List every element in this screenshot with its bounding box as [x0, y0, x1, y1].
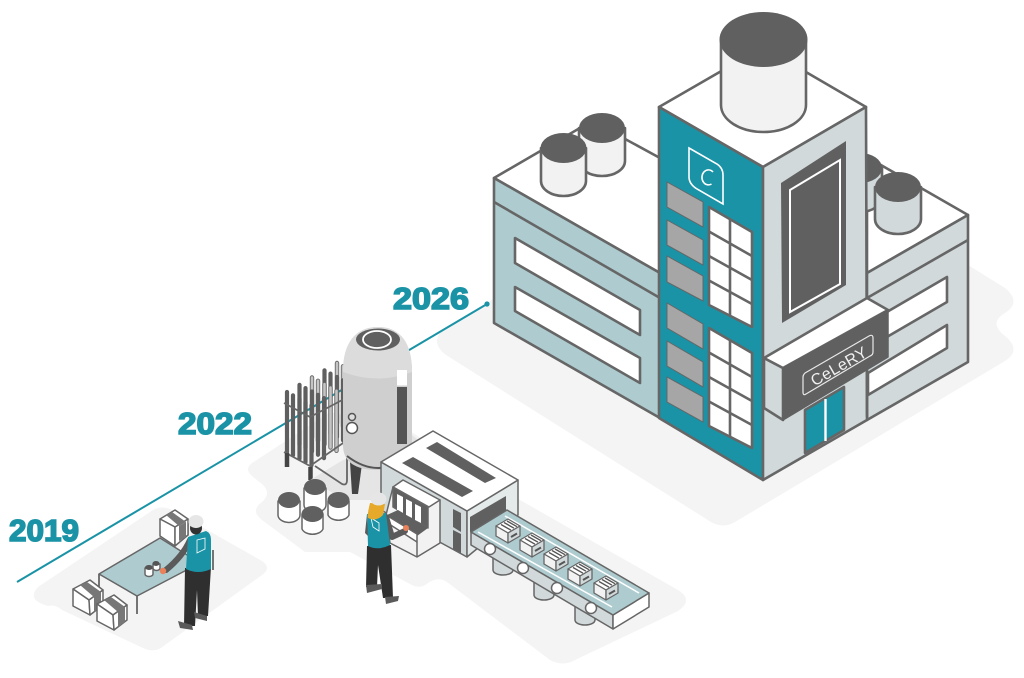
big rooftop tank: [720, 12, 808, 132]
torso: [367, 513, 390, 548]
belt end: [613, 593, 649, 629]
machine opening: [470, 496, 506, 532]
tower tall dark window: [781, 141, 846, 323]
workbench: [73, 510, 213, 630]
rooftop tanks left: [540, 113, 625, 196]
tank gauges: [346, 414, 358, 434]
table legs: [99, 550, 213, 614]
celery logo badge: [689, 148, 723, 204]
celery sign: CeLeRY: [808, 344, 871, 390]
tank floor shadow: [310, 435, 425, 500]
legs: [366, 545, 393, 598]
entrance door: [805, 373, 867, 453]
belt top: [471, 510, 649, 615]
tower window grid lower: [709, 328, 752, 448]
year label 2026: 2026: [393, 281, 469, 316]
control console: [386, 480, 440, 557]
torso: [186, 531, 211, 572]
right wing roof and tanks: [838, 153, 968, 273]
front-left box: [73, 580, 103, 615]
vent stripes: [402, 442, 496, 497]
tank stripe: [397, 370, 407, 444]
boxes on belt: [496, 519, 618, 600]
ground shadow: workbench: [34, 507, 267, 650]
factory building: [494, 12, 968, 480]
drums: [278, 479, 350, 534]
head: [190, 522, 202, 534]
tank body: [343, 327, 412, 470]
conveyor belt: [471, 510, 649, 629]
tower teal face: [659, 107, 763, 480]
rollers: [484, 544, 596, 614]
table top: [99, 538, 200, 596]
ground shadow: production line: [248, 412, 686, 664]
entrance canopy: [764, 298, 888, 420]
machine right face: [467, 480, 518, 557]
arm and hand: [386, 517, 405, 537]
shoes: [178, 612, 207, 630]
hard hat: [370, 492, 386, 506]
year label 2019: 2019: [9, 513, 79, 548]
machine top: [381, 431, 518, 511]
production machine: [381, 431, 518, 557]
year label 2022: 2022: [178, 406, 252, 441]
worker at control panel: [365, 492, 409, 604]
left wing facade: [494, 178, 660, 418]
tower roof: [659, 47, 866, 167]
tower window grid upper: [709, 207, 752, 327]
ground shadow: building: [437, 265, 1014, 526]
gas tube rack: [284, 363, 362, 480]
right wing facade: [867, 215, 968, 420]
front-right box: [97, 595, 127, 630]
tank pipe: [315, 437, 357, 484]
belt side: [471, 532, 613, 629]
worker at workbench: [160, 515, 211, 630]
machine left face: [381, 462, 467, 557]
hard hat: [188, 515, 204, 528]
cups: [145, 561, 160, 576]
left wing roof: [494, 121, 660, 273]
grey facade panels: [667, 182, 703, 422]
legs: [184, 567, 211, 626]
storage tank: [310, 327, 425, 500]
celery sign: [803, 335, 873, 395]
timeline line: [17, 301, 490, 582]
tank legs: [350, 462, 362, 494]
tower grey face: [763, 107, 867, 480]
tank top port: [356, 328, 400, 350]
arm and hand: [166, 540, 190, 570]
shoes: [366, 584, 399, 604]
back box: [160, 510, 188, 546]
conveyor supports: [493, 555, 595, 625]
hair: [368, 503, 385, 519]
machine side panels: [453, 509, 461, 553]
